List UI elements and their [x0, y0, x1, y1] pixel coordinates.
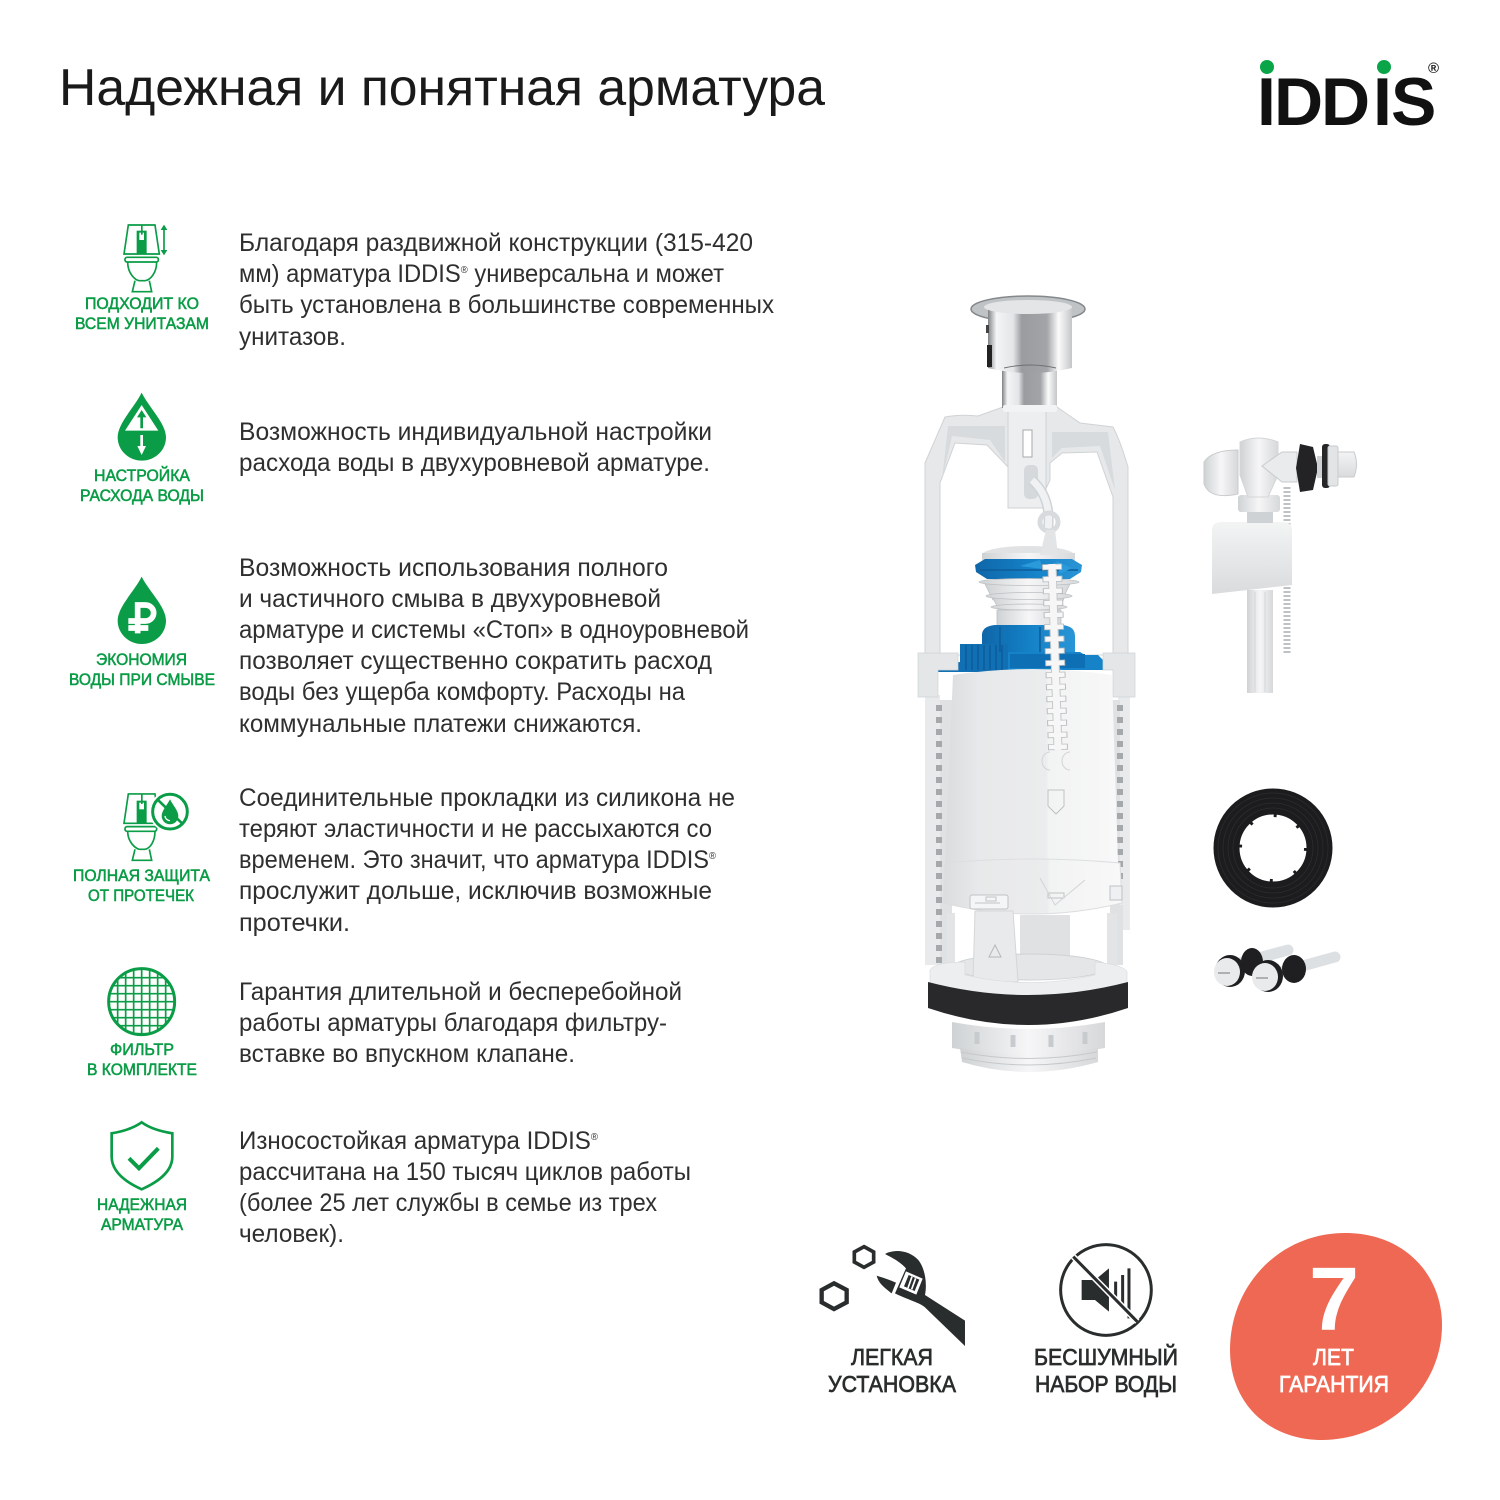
label: reliable fittings: НАДЕЖНАЯ [97, 1196, 187, 1214]
icon: toilet with height arrow [124, 225, 167, 292]
label: flow adjustment [80, 466, 204, 505]
icon: toilet with no-leak sign [124, 791, 191, 860]
gantry side tabs [918, 653, 1135, 697]
label: fits all toilets: ВСЕМ УНИТАЗАМ [75, 315, 209, 333]
label: flow adjustment: РАСХОДА ВОДЫ [80, 487, 204, 505]
screw rod [1284, 487, 1290, 653]
text block 4: ® [709, 851, 717, 862]
badge: 7-year warranty: ЛЕТ [1313, 1344, 1354, 1370]
text block 4: Соединительные прокладки из силикона не [239, 784, 735, 812]
icon: wrench and nuts [822, 1247, 965, 1346]
text block 1 [239, 229, 774, 351]
label: silent water fill: БЕСШУМНЫЙ [1034, 1343, 1178, 1370]
label: reliable fittings: АРМАТУРА [101, 1216, 183, 1234]
product: fixing bolts [1214, 948, 1335, 992]
feature 6: reliable fittings [97, 1122, 691, 1248]
collar [1238, 495, 1280, 512]
badge: 7-year warranty: ГАРАНТИЯ [1279, 1371, 1389, 1397]
text block 3: коммунальные платежи снижаются. [239, 710, 642, 738]
text block 5: работы арматуры благодаря фильтру- [239, 1009, 667, 1037]
badge: 7-year warranty [1230, 1233, 1442, 1440]
feature 3: water savings [69, 554, 749, 738]
text block 5 [239, 978, 682, 1068]
feature 2: flow adjustment [80, 393, 712, 505]
label: flow adjustment: НАСТРОЙКА [94, 466, 190, 485]
legs and inner tube [947, 905, 1120, 982]
label: reliable fittings [97, 1196, 187, 1234]
logo: IDDIS: ® [1428, 60, 1439, 77]
text block 3: арматуре и системы «Стоп» в одноуровневой [239, 616, 749, 644]
badge: 7-year warranty: 7 [1309, 1250, 1359, 1350]
upper valve white cap [982, 546, 1075, 564]
side cylinder [1204, 450, 1238, 496]
lower body band [943, 859, 1122, 914]
blue ring [975, 559, 1082, 579]
side racks [925, 695, 1130, 965]
bead chain [1052, 564, 1058, 750]
text block 4 [239, 784, 735, 937]
icon: drop with ruble [118, 577, 166, 644]
label: leak protection: ОТ ПРОТЕЧЕК [88, 887, 194, 905]
product: flush mechanism [918, 296, 1135, 1072]
stem [1247, 508, 1273, 523]
feature 4: leak protection [73, 784, 735, 937]
text block 4: прослужит дольше, исключив возможные [239, 877, 712, 905]
bellows [979, 578, 1079, 626]
icon: mesh filter [109, 969, 175, 1035]
text block 6 [239, 1127, 691, 1248]
valve tube [1247, 590, 1273, 693]
text block 5: Гарантия длительной и бесперебойной [239, 978, 682, 1006]
float box [1212, 522, 1292, 594]
white base ring [930, 962, 1127, 997]
text block 4: теряют эластичности и не рассыхаются со [239, 815, 712, 843]
black cone gasket [1296, 444, 1318, 492]
blue base [938, 625, 1103, 672]
text block 6: рассчитана на 150 тысяч циклов работы [239, 1158, 691, 1186]
valve head [1240, 438, 1278, 497]
arm [1262, 452, 1297, 482]
back bolt [1240, 948, 1288, 976]
text block 1: Благодаря раздвижной конструкции (315-420 [239, 229, 753, 257]
icon: silent (muted speaker) [1061, 1245, 1151, 1335]
chain hook [1032, 480, 1058, 555]
label: easy installation: ЛЕГКАЯ [851, 1344, 933, 1370]
washer and nut [1317, 444, 1338, 488]
label: filter included [87, 1041, 197, 1079]
text block 1: ® [461, 265, 468, 276]
text block 1: унитазов. [239, 323, 346, 351]
product: fill valve [1204, 438, 1356, 693]
text block 6: человек). [239, 1220, 344, 1248]
label: silent water fill: НАБОР ВОДЫ [1035, 1371, 1177, 1397]
text block 5: вставке во впускном клапане. [239, 1040, 575, 1068]
text block 2 [239, 418, 712, 477]
icon: drop with arrows [118, 393, 166, 461]
title: Надежная и понятная арматура [59, 59, 825, 117]
label: water savings: ВОДЫ ПРИ СМЫВЕ [69, 671, 215, 689]
text block 3 [239, 554, 749, 738]
text block 6: Износостойкая арматура IDDIS [239, 1127, 604, 1155]
text block 4: протечки. [239, 909, 350, 937]
label: fits all toilets [75, 295, 209, 333]
label: silent water fill [1034, 1343, 1178, 1397]
text block 1: быть установлена в большинстве современных [239, 291, 774, 319]
label: filter included: ФИЛЬТР [110, 1041, 174, 1059]
bolt heads [1214, 955, 1283, 992]
text block 6: ® [591, 1132, 599, 1143]
feature 1: fits all toilets [75, 225, 774, 351]
front bolt [1270, 955, 1335, 983]
threaded outlet [952, 1022, 1105, 1072]
label: leak protection: ПОЛНАЯ ЗАЩИТА [73, 867, 210, 885]
text block 3: Возможность использования полного [239, 554, 668, 582]
text block 2: Возможность индивидуальной настройки [239, 418, 712, 446]
text block 2: расхода воды в двухуровневой арматуре. [239, 449, 710, 477]
text block 4: временем. Это значит, что арматура IDDIS [239, 846, 737, 874]
bracket centre post [1008, 410, 1046, 508]
bracket frame [925, 407, 1128, 655]
logo: IDDIS: IDDIS [1257, 64, 1436, 140]
label: easy installation: УСТАНОВКА [828, 1371, 957, 1397]
text block 3: позволяет существенно сократить расход [239, 647, 712, 675]
label: water savings: ЭКОНОМИЯ [96, 651, 187, 669]
body details [970, 752, 1122, 909]
main tank body [945, 669, 1118, 863]
icon: shield with check [112, 1122, 172, 1189]
bracket wing shading [942, 426, 1115, 490]
chrome button [971, 296, 1085, 412]
text block 1: универсальна и может [468, 260, 725, 288]
thread [1338, 452, 1356, 477]
label: leak protection [73, 867, 210, 905]
text block 1: мм) арматура IDDIS [239, 260, 472, 288]
label: easy installation [828, 1344, 957, 1397]
label: water savings [69, 651, 215, 689]
black rubber ring [928, 982, 1128, 1025]
text block 3: и частичного смыва в двухуровневой [239, 585, 661, 613]
text block 6: (более 25 лет службы в семье из трех [239, 1189, 657, 1217]
feature 5: filter included [87, 969, 682, 1079]
label: filter included: В КОМПЛЕКТЕ [87, 1061, 197, 1079]
label: fits all toilets: ПОДХОДИТ КО [85, 295, 199, 313]
product: gasket [1218, 793, 1328, 903]
text block 3: воды без ущерба комфорту. Расходы на [239, 678, 685, 706]
